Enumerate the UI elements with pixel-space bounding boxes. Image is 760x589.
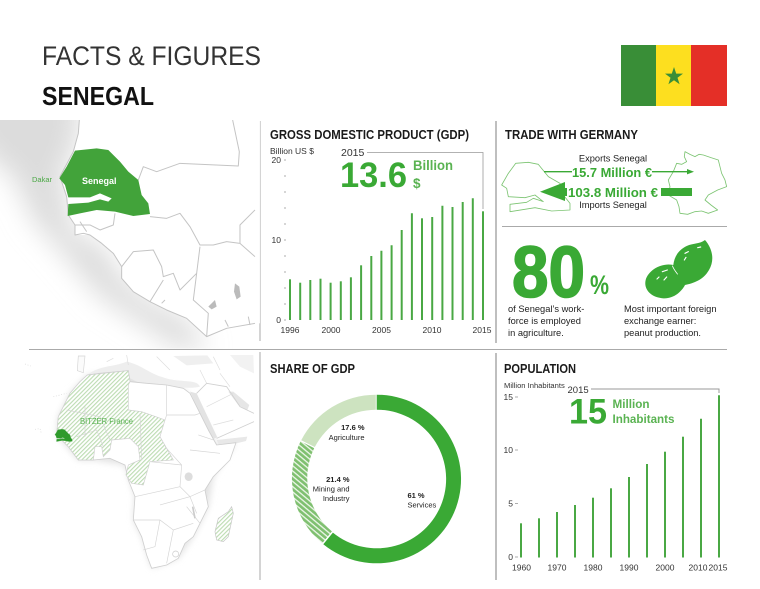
bar chart: population: 1960 xyxy=(512,562,531,572)
trade diagram: 15.7 Million € xyxy=(572,165,652,180)
map: Senegal in West Africa xyxy=(0,120,260,348)
callout: GDP 2015: $ xyxy=(413,176,421,191)
label: Dakar: Dakar xyxy=(32,175,53,184)
label: mining: 21.4 % xyxy=(326,475,350,484)
Germany outline xyxy=(668,152,727,214)
label: services: 61 % xyxy=(408,491,425,500)
bar chart: population: 2015 xyxy=(709,562,728,572)
bar chart: GDP: 20 xyxy=(272,155,281,165)
callout: population 2015: Million xyxy=(612,399,650,411)
label: mining: Industry xyxy=(323,494,350,503)
callout: population 2015: Inhabitants xyxy=(612,414,674,426)
bar chart: GDP: 2010 xyxy=(423,325,442,335)
Madagascar xyxy=(215,507,233,542)
Senegal shape xyxy=(59,148,150,216)
trade diagram: Imports Senegal xyxy=(579,200,647,210)
bar chart: population: 1980 xyxy=(584,562,603,572)
trade diagram: Exports Senegal xyxy=(579,154,647,164)
bar chart: population xyxy=(504,381,728,572)
segment: mining and industry xyxy=(292,441,332,543)
heading: country name: SENEGAL xyxy=(42,81,154,111)
bar chart: GDP: 10 xyxy=(272,235,281,245)
stat: 80 percent: in agriculture. xyxy=(508,328,564,338)
country borders xyxy=(67,385,220,563)
icon: flag of Senegal xyxy=(621,45,727,106)
text: peanut production: peanut production. xyxy=(624,328,701,338)
segment: services xyxy=(323,395,461,563)
Mediterranean and gulfs xyxy=(87,362,200,388)
bar chart: GDP xyxy=(270,146,492,335)
text: peanut production xyxy=(624,304,716,338)
bar chart: population: 2010 xyxy=(689,562,708,572)
stat: 80 percent: 80 xyxy=(512,233,585,313)
bar chart: population: 15 xyxy=(504,392,513,402)
Senegal marker xyxy=(55,429,72,442)
text: peanut production: exchange earner: xyxy=(624,316,696,326)
label: BITZER France: BITZER France xyxy=(80,416,133,426)
bar chart: GDP: 0 xyxy=(276,315,281,325)
bar chart: GDP: 2000 xyxy=(322,325,341,335)
map: Africa xyxy=(25,355,254,568)
stat: 80 percent xyxy=(508,233,609,338)
callout: population 2015: 15 xyxy=(569,392,607,432)
label: agriculture: Agriculture xyxy=(329,433,364,442)
continent xyxy=(57,371,236,568)
bar chart: GDP: 2005 xyxy=(372,325,391,335)
title: facts and figures: FACTS & FIGURES xyxy=(42,41,261,71)
segment: agriculture xyxy=(301,395,376,447)
label: Senegal: Senegal xyxy=(82,176,117,186)
label: mining xyxy=(313,475,350,503)
callout: population 2015 xyxy=(568,385,719,432)
bar chart: population: 1970 xyxy=(548,562,567,572)
Atlantic islands xyxy=(25,364,67,433)
hatched region xyxy=(57,371,173,485)
stat: 80 percent: % xyxy=(590,270,609,300)
bar chart: population: Million Inhabitants xyxy=(504,381,565,390)
icon: peanut xyxy=(645,240,712,298)
callout: GDP 2015: 2015 xyxy=(341,147,365,159)
trade diagram xyxy=(502,152,727,214)
label: services xyxy=(408,491,437,510)
heading: share of GDP: SHARE OF GDP xyxy=(270,361,355,376)
label: agriculture: 17.6 % xyxy=(341,423,365,432)
bar chart: population: 0 xyxy=(508,552,513,562)
heading: trade: TRADE WITH GERMANY xyxy=(505,127,638,142)
text: peanut production: Most important foreign xyxy=(624,304,716,314)
bar chart: GDP: Billion US $ xyxy=(270,146,314,156)
callout: GDP 2015: 13.6 xyxy=(340,156,407,195)
bar chart: GDP: 2015 xyxy=(473,325,492,335)
trade diagram: 103.8 Million € xyxy=(568,185,658,200)
bar chart: population: 1990 xyxy=(620,562,639,572)
label: mining: Mining and xyxy=(313,484,350,494)
bar chart: population: 2000 xyxy=(656,562,675,572)
bar chart: population: 5 xyxy=(508,498,513,508)
bar chart: population: 10 xyxy=(504,445,513,455)
bar chart: GDP: 1996 xyxy=(281,325,300,335)
heading: GDP: GROSS DOMESTIC PRODUCT (GDP) xyxy=(270,127,469,142)
label: services: Services xyxy=(408,500,437,510)
label: agriculture xyxy=(329,423,365,442)
callout: GDP 2015: Billion xyxy=(413,158,453,173)
stat: 80 percent: force is employed xyxy=(508,316,581,326)
stat: 80 percent: of Senegal’s work- xyxy=(508,304,584,314)
donut chart xyxy=(292,395,461,563)
callout: GDP 2015 xyxy=(340,147,483,209)
callout: population 2015: 2015 xyxy=(568,385,589,396)
Senegal outline xyxy=(502,162,570,212)
heading: population: POPULATION xyxy=(504,361,576,376)
